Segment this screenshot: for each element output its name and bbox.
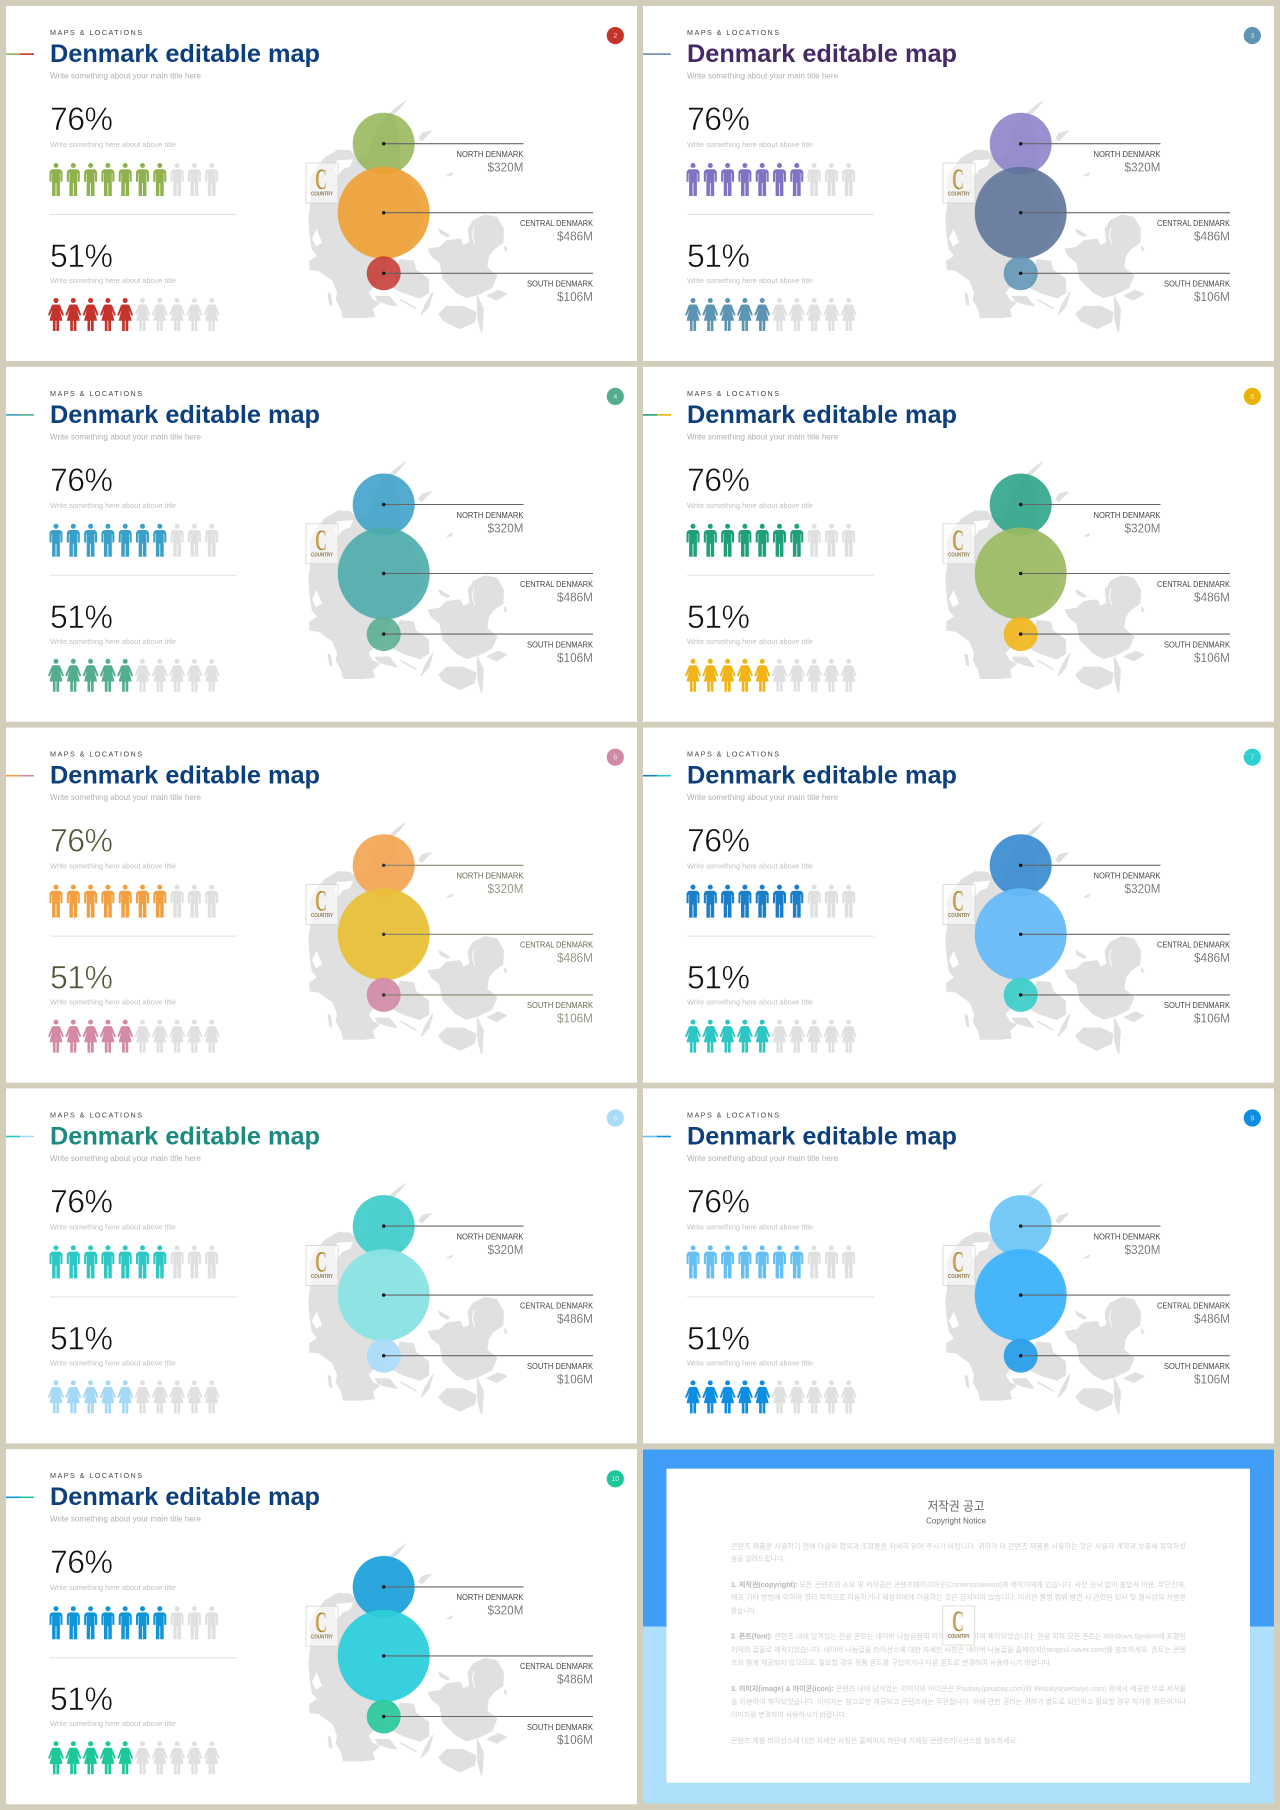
bubble: south [1004,617,1038,651]
callout: south [382,993,593,1026]
stat note: Write something here about above title [50,140,176,149]
subtitle: Write something about your main title here [50,432,202,441]
men pictogram [50,163,218,196]
bubble: south [367,1700,401,1734]
callout: central: $486M [557,951,593,965]
eyebrow: MAPS & LOCATIONS [687,389,779,398]
accent line [6,1496,34,1498]
women pictogram [48,1380,220,1413]
watermark: COUNTRY [311,913,334,919]
callout: central [382,211,593,244]
callout: south: $106M [557,1012,593,1026]
bubble: south [1004,256,1038,290]
callout: south: $106M [1194,1372,1230,1386]
stat note: Write something here about above title [50,998,176,1007]
eyebrow: MAPS & LOCATIONS [50,750,142,759]
women pictogram [685,1020,857,1053]
callout: central: CENTRAL DENMARK [1157,219,1230,228]
page badge: 7 [1250,755,1254,762]
notice body: 배포 기타 방법에 의하여 영리 목적으로 이용하거나 제삼자에게 이용하는 것은 금지되어 있습니다. 이러한 불법 행위 발견 시 관련된 민사 및 형사상의 처벌을 [731,1592,1187,1602]
callout: north [382,503,524,535]
callout: north: $320M [488,882,524,896]
notice body: 음을 알려드립니다. [731,1554,785,1563]
callout: north: $320M [488,1243,524,1257]
callout: central: $486M [1194,1312,1230,1326]
bubble: central [975,888,1067,980]
page badge: 9 [1250,1115,1254,1122]
men pictogram [686,1245,855,1278]
title: Denmark editable map [687,401,957,429]
callout: south: SOUTH DENMARK [1164,280,1230,289]
watermark [943,885,975,925]
callout: central [382,933,593,965]
eyebrow: MAPS & LOCATIONS [50,389,142,398]
page badge: 10 [611,1476,619,1483]
bubble: south [367,978,401,1012]
stat note: Write something here about above title [687,1222,813,1231]
callout: north: NORTH DENMARK [1094,1232,1161,1241]
subtitle: Write something about your main title here [687,793,839,802]
stat 51%: 51% [50,1320,113,1356]
callout: north: $320M [1124,160,1160,174]
callout: central: $486M [1194,230,1230,244]
notice body [731,1542,1187,1745]
callout: south: SOUTH DENMARK [527,1362,593,1371]
callout: central: CENTRAL DENMARK [520,1301,593,1310]
callout: north: NORTH DENMARK [456,872,524,881]
callout: north [382,864,524,896]
callout: south [382,1715,593,1747]
callout: central: CENTRAL DENMARK [520,1662,593,1671]
subtitle: Write something about your main title here [687,432,839,441]
bubble: north [353,1556,415,1618]
callout: south: $106M [1194,290,1230,304]
accent line [643,414,671,416]
callout: central: $486M [557,230,593,244]
panel: slide 6 [6,728,637,1083]
bubble: north [990,834,1052,896]
callout: central [382,572,593,604]
map of Denmark [309,1183,507,1414]
page badge: 3 [1250,33,1254,40]
page badge [607,749,624,766]
bubble: south [367,1339,401,1373]
map of Denmark [309,822,507,1053]
bubble: central [338,528,430,620]
callout: south [1019,993,1230,1026]
map of Denmark [946,822,1144,1053]
women pictogram [48,1020,220,1053]
stat note: Write something here about above title [50,1719,176,1728]
stat note: Write something here about above title [50,276,176,285]
callout: central [382,1293,593,1326]
watermark: C [315,1606,327,1639]
callout: north [382,1585,524,1618]
notice body: 을 이용하여 제작되었습니다. 이미지는 참고로만 제공되고 콘텐츠에는 무관합니다. 이에 관한 권리는 귀하가 별도로 확인하고 필요할 경우 허가를 취득하거나 [731,1697,1187,1706]
stat 76%: 76% [687,1183,750,1219]
stat 76%: 76% [50,1183,113,1219]
notice body: 받습니다. [731,1606,757,1615]
notice body: 콘텐츠 제품 라이선스에 대한 자세한 사항은 홈페이지 하단에 기재된 콘텐츠라이선스를 참조하세요. [731,1736,1018,1745]
callout: north: NORTH DENMARK [456,150,524,159]
callout: north [1019,1224,1161,1257]
callout: south [1019,1354,1230,1386]
subtitle: Write something about your main title here [687,1154,839,1163]
eyebrow: MAPS & LOCATIONS [687,28,779,37]
bubble: south [1004,1339,1038,1373]
callout: north: $320M [1124,882,1160,896]
callout: south: SOUTH DENMARK [1164,1362,1230,1371]
watermark: C [952,524,964,557]
callout: south [382,1354,593,1386]
callout: north [382,142,524,174]
callout: central: CENTRAL DENMARK [520,941,593,950]
callout: south: $106M [557,1372,593,1386]
accent line [6,1136,34,1137]
stat 76%: 76% [50,101,113,137]
notice subheading: Copyright Notice [926,1516,986,1526]
notice body: 츠와 함께 제공되지 않으므로, 필요할 경우 정품 폰트를 구입하거나 다른 폰트로 변경하여 사용하시기 바랍니다. [731,1658,1052,1667]
callout: south: $106M [1194,1012,1230,1026]
callout: central: CENTRAL DENMARK [520,580,593,589]
watermark: COUNTRY [948,913,971,919]
stat 51%: 51% [687,1320,750,1356]
stat 76%: 76% [687,823,750,859]
stat 51%: 51% [687,960,750,996]
stat note: Write something here about above title [50,501,176,510]
title: Denmark editable map [687,40,957,68]
bubble: central [975,167,1067,259]
callout: central: $486M [1194,951,1230,965]
bubble: south [367,256,401,290]
callout: south: $106M [557,1733,593,1747]
callout: central: $486M [1194,590,1230,604]
eyebrow: MAPS & LOCATIONS [50,1471,142,1480]
men pictogram [50,885,218,918]
page badge: 8 [613,1115,617,1122]
watermark: COUNTRY [311,1274,334,1280]
stat 76%: 76% [50,1544,113,1580]
watermark: COUNTRY [311,552,334,558]
callout: south: SOUTH DENMARK [527,280,593,289]
stat 51%: 51% [50,1681,113,1717]
callout: north: $320M [488,521,524,535]
page badge [607,27,624,44]
panel: slide 2 [6,6,637,361]
page badge: 2 [613,33,617,40]
watermark: COUNTRY [948,1634,970,1640]
panel: slide 9 [643,1088,1274,1443]
watermark [306,1245,338,1285]
women pictogram [48,1741,220,1774]
page badge: 5 [1250,394,1254,401]
callout: central: $486M [557,1312,593,1326]
accent line [6,775,34,776]
callout: north: NORTH DENMARK [1094,511,1161,520]
bubble: central [338,167,430,259]
bubble: north [990,1195,1052,1257]
accent line [643,53,671,55]
callout: south [1019,272,1230,304]
callout: north: $320M [488,160,524,174]
men pictogram [50,524,218,557]
subtitle: Write something about your main title here [50,1154,202,1163]
stat note: Write something here about above title [687,1358,813,1367]
men pictogram [686,524,855,557]
eyebrow: MAPS & LOCATIONS [50,1110,142,1119]
watermark: C [952,1245,964,1278]
callout: north: NORTH DENMARK [1094,150,1161,159]
panel: slide 3 [643,6,1274,361]
bubble: north [990,474,1052,536]
watermark [943,163,975,203]
panel: slide 10 [6,1449,637,1804]
stat 51%: 51% [687,599,750,635]
eyebrow: MAPS & LOCATIONS [687,750,779,759]
callout: south: $106M [557,290,593,304]
stat note: Write something here about above title [50,1583,176,1592]
map of Denmark [946,1183,1144,1414]
map of Denmark [309,1544,507,1775]
subtitle: Write something about your main title here [50,1515,202,1524]
bubble: south [1004,978,1038,1012]
stat 76%: 76% [50,462,113,498]
accent line [6,414,34,416]
panel: slide 4 [6,367,637,722]
callout: north [382,1224,524,1257]
watermark: C [952,885,964,918]
panel: slide 8 [6,1088,637,1443]
stat note: Write something here about above title [687,637,813,646]
bubble: central [338,1610,430,1702]
stat 51%: 51% [50,238,113,274]
watermark: C [315,163,327,196]
watermark: COUNTRY [948,192,971,198]
watermark [306,885,338,925]
callout: north: $320M [488,1604,524,1618]
notice body: 이미지를 변경하여 사용하시기 바랍니다. [731,1710,847,1719]
watermark [943,1245,975,1285]
panel: slide 7 [643,728,1274,1083]
accent line [643,1136,671,1137]
women pictogram [685,298,857,331]
men pictogram [50,1606,218,1639]
stat 76%: 76% [50,823,113,859]
panel: slide 5 [643,367,1274,722]
callout: south: SOUTH DENMARK [1164,640,1230,649]
callout: south: $106M [557,651,593,665]
callout: south: $106M [1194,651,1230,665]
page badge: 6 [613,755,617,762]
callout: north: NORTH DENMARK [456,511,524,520]
bubble: central [975,528,1067,620]
watermark: C [315,1245,327,1278]
map of Denmark [946,101,1144,332]
notice body: 1. 저작권(copyright): 모든 콘텐츠의 소유 및 저작권은 콘텐츠테이크아웃(Contentstakeout)과 제작자에게 있습니다. 사전 승낙 없이 불법적 이용, 무단전재, [731,1580,1186,1589]
map of Denmark [309,101,507,332]
map of Denmark [309,462,507,693]
accent line [643,775,671,776]
panel: copyright notice [643,1450,1274,1804]
watermark: COUNTRY [311,192,334,198]
page badge [1244,388,1261,405]
callout: south: SOUTH DENMARK [1164,1001,1230,1010]
bubble: north [353,1195,415,1257]
stat 51%: 51% [687,238,750,274]
eyebrow: MAPS & LOCATIONS [50,28,142,37]
stat 51%: 51% [50,599,113,635]
watermark: C [952,1605,964,1638]
callout: central: CENTRAL DENMARK [1157,580,1230,589]
stat note: Write something here about above title [687,501,813,510]
watermark: COUNTRY [948,552,971,558]
callout: north [1019,503,1161,535]
women pictogram [48,659,220,692]
callout: south [382,272,593,304]
stat note: Write something here about above title [687,862,813,871]
callout: south: SOUTH DENMARK [527,640,593,649]
callout: central: CENTRAL DENMARK [1157,1301,1230,1310]
callout: south: SOUTH DENMARK [527,1001,593,1010]
callout: north [1019,864,1161,896]
page badge [607,388,624,405]
callout: north: NORTH DENMARK [1094,872,1161,881]
callout: central [1019,211,1230,244]
women pictogram [685,1380,857,1413]
watermark: COUNTRY [311,1635,334,1641]
callout: south [1019,632,1230,665]
bubble: south [367,617,401,651]
callout: central: $486M [557,590,593,604]
bubble: north [353,834,415,896]
bubble: central [975,1249,1067,1341]
watermark [306,1606,338,1646]
stat note: Write something here about above title [50,862,176,871]
callout: central [382,1654,593,1687]
callout: central: CENTRAL DENMARK [1157,941,1230,950]
bubble: north [990,113,1052,175]
notice body: 콘텐츠 제품을 사용하기 전에 다음의 합의과 조항들을 자세히 읽어 주시기 바랍니다. 귀하가 이 콘텐츠 제품을 사용하는 것은 사용자 계약과 보증에 동의하셨 [731,1542,1187,1550]
eyebrow: MAPS & LOCATIONS [687,1110,779,1119]
watermark: C [952,163,964,196]
callout: north: NORTH DENMARK [456,1232,524,1241]
bubble: central [338,888,430,980]
callout: central: CENTRAL DENMARK [520,219,593,228]
callout: central [1019,933,1230,965]
women pictogram [685,659,857,692]
page badge [1244,749,1261,766]
title: Denmark editable map [50,40,320,68]
callout: north: $320M [1124,1243,1160,1257]
stat note: Write something here about above title [687,276,813,285]
men pictogram [686,163,855,196]
page badge [1244,1109,1261,1127]
notice heading: 저작권 공고 [928,1500,984,1514]
page badge [1244,27,1261,44]
watermark [306,524,338,564]
notice body: 2. 폰트(font): 콘텐츠 내에 담겨있는 한글 폰트는 네이버 나눔글꼴의 저작권을 준수하여 제작되었습니다. 한글 외의 모든 폰트는 Windows System에 포함된 [731,1632,1186,1640]
stat note: Write something here about above title [687,140,813,149]
title: Denmark editable map [687,762,957,790]
stat note: Write something here about above title [50,1358,176,1367]
watermark: COUNTRY [948,1274,971,1280]
watermark: C [315,885,327,918]
men pictogram [50,1245,218,1278]
stat note: Write something here about above title [50,637,176,646]
callout: central [1019,572,1230,604]
callout: central: $486M [557,1673,593,1687]
subtitle: Write something about your main title here [687,72,839,80]
title: Denmark editable map [50,762,320,790]
subtitle: Write something about your main title here [50,72,202,80]
callout: north [1019,142,1161,174]
stat 51%: 51% [50,960,113,996]
callout: north: $320M [1124,521,1160,535]
stat note: Write something here about above title [50,1222,176,1231]
men pictogram [686,885,855,918]
callout: south [382,632,593,665]
subtitle: Write something about your main title here [50,793,202,802]
title: Denmark editable map [50,1122,320,1150]
bubble: north [353,474,415,536]
stat note: Write something here about above title [687,998,813,1007]
title: Denmark editable map [687,1122,957,1150]
women pictogram [48,298,220,331]
watermark [306,163,338,203]
page badge [607,1470,624,1487]
notice body: 저작의 글꼴로 제작되었습니다. 네이버 나눔글꼴 라이선스에 대한 자세한 사항은 네이버 나눔글꼴 홈페이지(hangeul.naver.com)를 참조하세요. 폰트는 콘텐 [731,1645,1186,1654]
bubble: central [338,1249,430,1341]
watermark [943,524,975,564]
callout: south: SOUTH DENMARK [527,1723,593,1732]
stat 76%: 76% [687,101,750,137]
title: Denmark editable map [50,1483,320,1511]
watermark [943,1605,975,1645]
notice body: 3. 이미지(image) & 아이콘(icon): 콘텐츠 내에 담겨있는 이미지와 아이콘은 Pixabay(pixabay.com)와 Webalys(webalys.com) 등에서 제공한 무료 저작물 [731,1684,1187,1693]
bubble: north [353,113,415,175]
title: Denmark editable map [50,401,320,429]
callout: central [1019,1293,1230,1326]
accent line [6,53,34,55]
map of Denmark [946,462,1144,693]
watermark: C [315,524,327,557]
page badge [607,1109,624,1127]
page badge: 4 [613,394,617,401]
callout: north: NORTH DENMARK [456,1593,524,1602]
stat 76%: 76% [687,462,750,498]
